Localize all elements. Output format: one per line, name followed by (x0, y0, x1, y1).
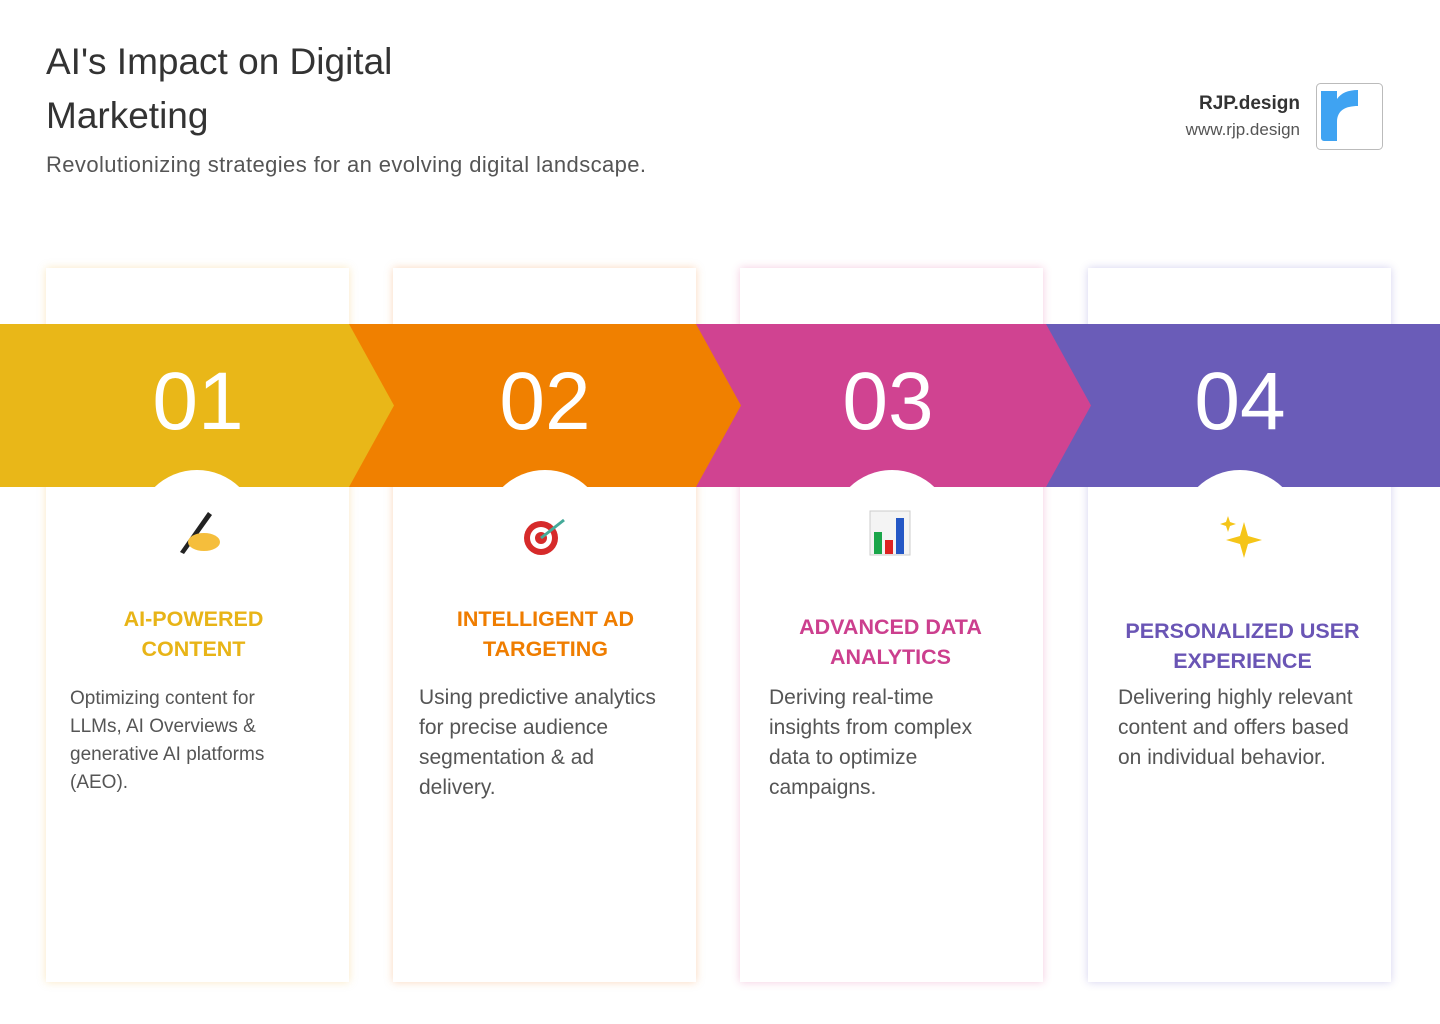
text: 02 (499, 356, 591, 447)
logo (1316, 83, 1383, 150)
heading 3 (799, 615, 982, 669)
brand url: www.rjp.design (1186, 120, 1300, 139)
heading 2 (457, 607, 634, 661)
heading 4: PERSONALIZED USER (1125, 619, 1360, 643)
icon: sparkles (1220, 516, 1262, 558)
text: 03 (842, 356, 934, 447)
heading 4 (1125, 619, 1360, 673)
text 2: Using predictive analytics for precise audience segmentation & ad delivery. (419, 686, 656, 799)
text 3: Deriving real-time insights from complex data to optimize campaigns. (769, 686, 972, 799)
heading 1: CONTENT (142, 637, 245, 661)
heading 1 (124, 607, 263, 661)
arrow band (0, 324, 1440, 487)
icon: writing hand (180, 512, 220, 554)
title: AI's Impact on Digital Marketing (46, 41, 392, 136)
icon: target (524, 518, 565, 555)
brand name: RJP.design (1199, 93, 1300, 114)
heading 4: EXPERIENCE (1173, 649, 1312, 673)
heading 1: AI-POWERED (124, 607, 263, 631)
cards (46, 268, 349, 982)
icon: bar chart (870, 510, 910, 556)
subtitle: Revolutionizing strategies for an evolving digital landscape. (46, 152, 646, 177)
text 4: Delivering highly relevant content and offers based on individual behavior. (1118, 686, 1353, 769)
heading 2: TARGETING (483, 637, 608, 661)
text 1: Optimizing content for LLMs, AI Overviews & generative AI platforms (AEO). (70, 688, 264, 793)
brand block (1186, 83, 1383, 150)
heading 3: ANALYTICS (830, 645, 951, 669)
heading 3: ADVANCED DATA (799, 615, 982, 639)
heading 2: INTELLIGENT AD (457, 607, 634, 631)
numbers: 01 (152, 356, 244, 447)
text: 04 (1194, 356, 1286, 447)
